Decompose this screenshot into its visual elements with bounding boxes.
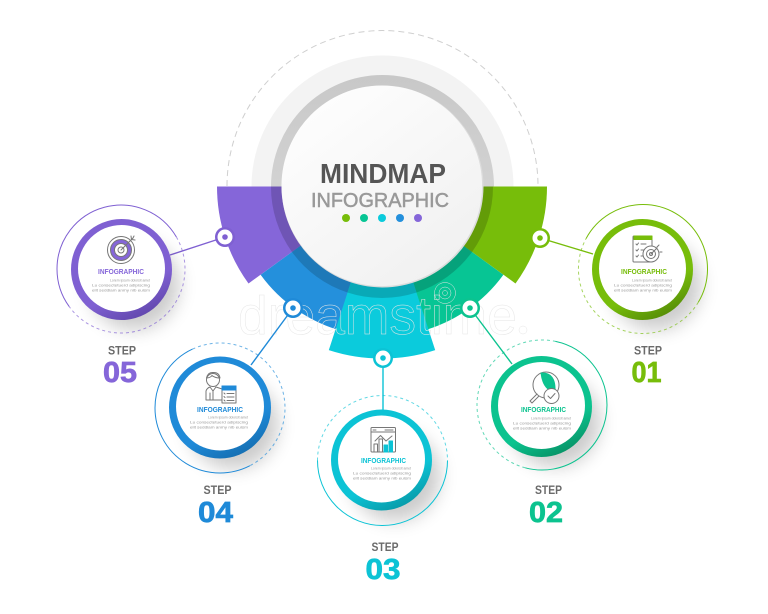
step label 04: STEP [204,483,232,497]
connector 03 [382,358,384,411]
shadow 04 [188,379,278,469]
step 05 module [57,205,225,389]
hub outer light ring [252,56,514,318]
step label 01: STEP [634,344,662,358]
hub grey ring [271,75,494,298]
body text 05 [92,278,151,292]
shadow 05 [89,240,179,330]
ring 01 [592,219,693,320]
icon: chart window [371,428,396,452]
orbit 02 [477,340,607,470]
watermark: dreamstime [238,286,517,346]
step label 03: STEP [372,540,398,554]
segment: step 03 cyan [329,186,435,359]
step 03 module [318,358,448,586]
step label 02: STEP [535,483,562,497]
body text 03: Lu consectetuerd adipiscing [353,470,411,476]
body text 03: elit seddiam anmy nib euism [353,476,411,480]
segment: step 01 green [382,186,547,284]
icon: checklist with target gear [633,236,662,262]
shadow 01 [611,240,701,330]
icon: target [108,236,135,264]
connector 02 [470,308,512,364]
hub white circle [282,86,484,288]
orbit 01 [578,204,708,334]
body text 04: Lu consectetuerd adipiscing [190,420,248,424]
orbit 05 [57,205,185,333]
icon: person with checklist [206,372,236,403]
body text 01 [614,278,673,292]
icon: magnifier with check [530,372,559,404]
node: step 01 [530,228,550,248]
body text 05: Lu consectetuerd adipiscing [92,282,150,288]
hub colour dots [342,214,422,222]
ring 04 [169,356,271,458]
body text 02: Lorem ipsum dolorsit amet [531,416,572,420]
body text 02: Lu consectetuerd adipiscing [513,420,571,426]
body text 02 [513,416,572,430]
node: step 05 [215,227,235,247]
number 05: 05 [103,357,137,389]
hub subtitle: INFOGRAPHIC [311,190,449,212]
node: step 03 [373,348,393,368]
body text 05: elit seddiam anmy nib euism [92,288,150,292]
segment: step 04 blue [261,186,382,331]
shadow 03 [350,431,440,521]
ring 02 [491,356,592,457]
ring 03 [331,410,432,510]
number 04: 04 [198,497,233,529]
node: step 04 [283,298,303,318]
segment: step 02 teal [382,186,503,331]
number 02: 02 [529,497,563,529]
shadow 02 [510,377,600,467]
body text 04: Lorem ipsum dolorsit amet [208,414,249,420]
step label 05: STEP [108,344,136,358]
step 01 module [540,204,708,389]
heading 03: INFOGRAPHIC [361,458,406,465]
body text 03: Lorem ipsum dolorsit amet [371,466,412,470]
step 04 module [155,308,293,529]
body text 05: Lorem ipsum dolorsit amet [110,278,151,282]
heading 04: INFOGRAPHIC [197,407,243,414]
dashed arc around hub [227,31,538,186]
orbit 03 [318,396,448,526]
body text 04 [190,414,249,430]
body text 04: elit seddiam anmy nib euism [190,424,248,430]
body text 01: elit seddiam anmy nib euism [614,288,672,292]
orbit 04 [155,343,285,473]
segment: step 05 purple [217,186,382,284]
step 02 module [470,308,607,529]
body text 01: Lorem ipsum dolorsit amet [632,278,673,282]
hub title: MINDMAP [320,158,446,189]
inner dark band on segments [271,186,493,298]
heading 01: INFOGRAPHIC [621,269,667,276]
body text 01: Lu consectetuerd adipiscing [614,282,672,288]
connector 04 [251,308,293,365]
number 01: 01 [632,357,662,389]
connector 01 [540,238,593,254]
heading 05: INFOGRAPHIC [98,269,144,276]
connector 05 [170,237,225,255]
ring 05 [71,219,172,320]
node: step 02 [460,298,480,318]
number 03: 03 [366,554,400,586]
body text 02: elit seddiam anmy nib euism [513,426,571,430]
heading 02: INFOGRAPHIC [521,407,566,414]
body text 03 [353,466,412,480]
